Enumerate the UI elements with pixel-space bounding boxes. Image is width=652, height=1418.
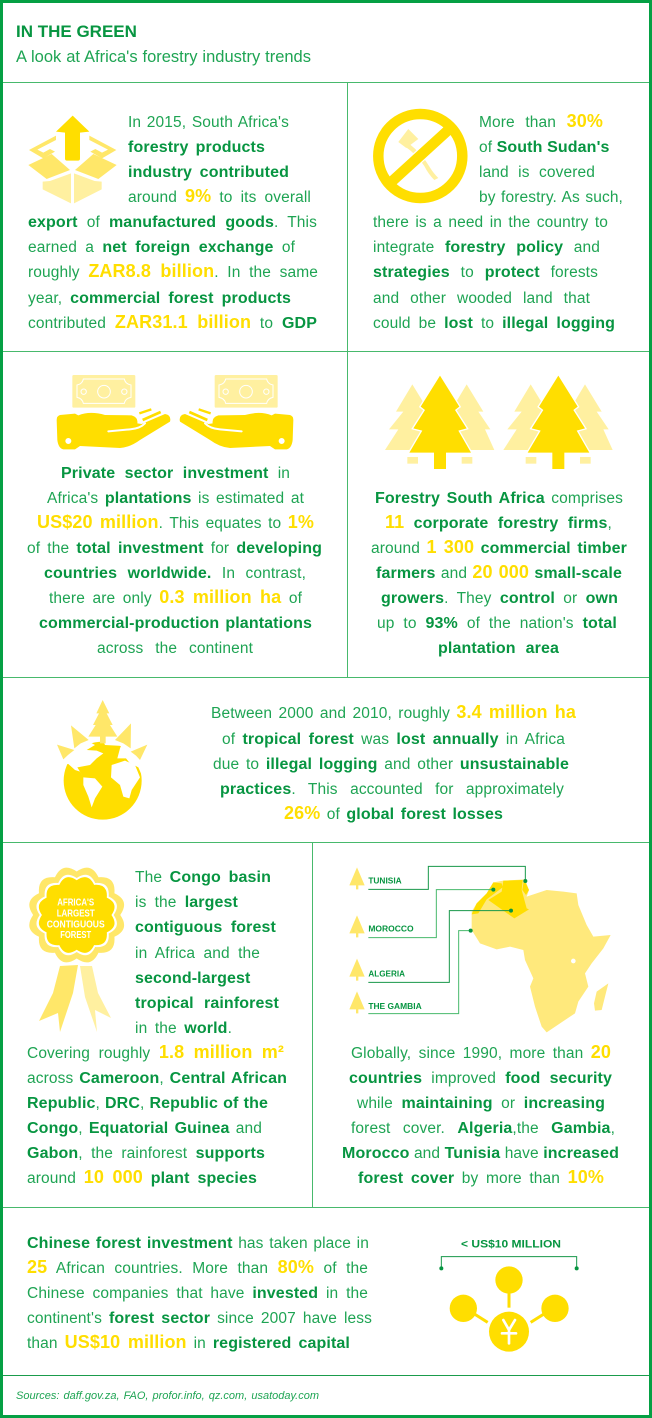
map: Africa with labelled countries: TUNISIA xyxy=(368,876,402,886)
panel: Chinese forest investment: Chinese companies that have invested in the xyxy=(27,1285,368,1302)
icon: open box with arrow xyxy=(28,116,116,204)
panel: Congo basin: in Africa and the xyxy=(135,945,260,962)
panel: food security: while maintaining or increasing xyxy=(357,1095,605,1112)
panel: export of forestry products: export of manufactured goods. This xyxy=(28,214,317,231)
panel: Forestry South Africa: plantation area xyxy=(438,640,559,657)
panel: food security: forest cover by more than 10% xyxy=(358,1167,604,1187)
text: food security xyxy=(342,1042,619,1187)
panel: Congo basin: around 10 000 plant species xyxy=(27,1167,257,1187)
icon: rosette badge: CONTIGUOUS xyxy=(47,920,105,930)
panel: South Sudan: strategies to protect forests xyxy=(373,264,598,281)
panel: export of forestry products: In 2015, South Africa's xyxy=(128,114,289,131)
map: Africa outline xyxy=(472,879,611,1032)
panel: private sector investment: countries worldwide. In contrast, xyxy=(44,565,306,582)
text: Forestry South Africa xyxy=(371,490,627,657)
text: export xyxy=(28,114,318,332)
panel: Congo basin: in the world. xyxy=(135,1020,232,1037)
panel: private sector investment: US$20 million. This equates to 1% xyxy=(37,512,314,532)
map: Africa with labelled countries: THE GAMBIA xyxy=(368,1001,422,1011)
panel: South Sudan: by forestry. As such, xyxy=(479,189,623,206)
panel: South Sudan: integrate forestry policy and xyxy=(373,239,600,256)
panel: South Sudan: More than 30% xyxy=(479,111,603,131)
panel: Congo basin: Gabon, the rainforest supports xyxy=(27,1145,265,1162)
icon: hands with banknotes xyxy=(56,375,294,450)
panel: Congo basin: Covering roughly 1.8 million m² xyxy=(27,1042,284,1062)
icon: rosette badge: LARGEST xyxy=(57,908,95,920)
text: Chinese investment xyxy=(27,1235,372,1352)
icon: no axe sign xyxy=(373,108,468,204)
panel: Chinese forest investment: continent's forest sector since 2007 have less xyxy=(27,1310,372,1327)
panel: Chinese forest investment: 25 African countries. More than 80% of the xyxy=(27,1257,368,1277)
panel: Congo basin: contiguous forest xyxy=(135,919,276,936)
panel: private sector investment: commercial-production plantations xyxy=(39,615,312,632)
panel: South Sudan: and other wooded land that xyxy=(373,290,590,307)
icon: rosette badge: AFRICA'S xyxy=(57,898,94,908)
panel: tropical forest loss: 26% of global forest losses xyxy=(284,803,503,823)
panel: private sector investment: there are only 0.3 million ha of xyxy=(49,587,302,607)
sources: Sources: daff.gov.za, FAO, profor.info, qz.com, usatoday.com xyxy=(16,1390,319,1402)
subtitle: A look at Africa's forestry industry trends xyxy=(16,48,311,66)
panel: Forestry South Africa: Forestry South Africa comprises xyxy=(375,490,623,507)
panel: private sector investment: of the total investment for developing xyxy=(27,540,322,557)
panel: export of forestry products: year, commercial forest products xyxy=(28,290,291,307)
panel: private sector investment: Private sector investment in xyxy=(61,465,290,482)
panel: tropical forest loss: Between 2000 and 2010, roughly 3.4 million ha xyxy=(211,702,576,722)
panel: export of forestry products: around 9% to its overall xyxy=(128,186,311,206)
panel: Chinese forest investment: than US$10 million in registered capital xyxy=(27,1332,350,1352)
panel: Forestry South Africa: around 1 300 commercial timber xyxy=(371,537,627,557)
panel: Forestry South Africa: farmers and 20 000 small-scale xyxy=(376,562,622,582)
panel: export of forestry products: earned a net foreign exchange of xyxy=(28,239,295,256)
icon: rosette badge: FOREST xyxy=(60,930,91,941)
text: tropical forest loss xyxy=(211,702,576,823)
icon: globe with trees xyxy=(57,700,148,820)
panel: Congo basin: The Congo basin xyxy=(135,869,271,886)
map: Africa with labelled countries xyxy=(349,866,611,1032)
panel: food security: Morocco and Tunisia have increased xyxy=(342,1145,619,1162)
panel: South Sudan: of South Sudan's xyxy=(479,139,610,156)
title: IN THE GREEN xyxy=(16,22,137,41)
panel: export of forestry products: roughly ZAR8.8 billion. In the same xyxy=(28,261,318,281)
text: South Sudan xyxy=(373,111,623,332)
panel: private sector investment: across the continent xyxy=(97,640,253,657)
panel: South Sudan: land is covered xyxy=(479,164,595,181)
icon: rosette badge xyxy=(29,868,124,1032)
panel: food security: Globally, since 1990, more than 20 xyxy=(351,1042,611,1062)
panel: tropical forest loss: of tropical forest was lost annually in Africa xyxy=(222,731,565,748)
panel: Forestry South Africa: up to 93% of the nation's total xyxy=(377,615,617,632)
map: Africa with labelled countries: ALGERIA xyxy=(368,969,406,979)
panel: Congo basin: second-largest xyxy=(135,970,250,987)
panel: Congo basin: Republic, DRC, Republic of the xyxy=(27,1095,268,1112)
panel: Forestry South Africa: growers. They control or own xyxy=(381,590,618,607)
panel: tropical forest loss: due to illegal logging and other unsustainable xyxy=(213,756,569,773)
icon: pine trees xyxy=(385,376,613,469)
panel: South Sudan: could be lost to illegal logging xyxy=(373,315,615,332)
icon: yuan network xyxy=(439,1239,579,1352)
panel: food security: countries improved food security xyxy=(349,1070,612,1087)
panel: food security: forest cover. Algeria,the Gambia, xyxy=(351,1120,615,1137)
icon: yuan network: < US$10 MILLION xyxy=(461,1239,561,1251)
panel: Congo basin: Congo, Equatorial Guinea and xyxy=(27,1120,262,1137)
panel: Chinese forest investment: Chinese forest investment has taken place in xyxy=(27,1235,369,1252)
panel: tropical forest loss: practices. This accounted for approximately xyxy=(220,781,564,798)
panel: Congo basin: is the largest xyxy=(135,894,238,911)
text: Congo basin xyxy=(27,869,287,1187)
panel: South Sudan: there is a need in the country to xyxy=(373,214,608,231)
text: private investment xyxy=(27,465,322,657)
panel: Congo basin: across Cameroon, Central African xyxy=(27,1070,287,1087)
panel: private sector investment: Africa's plantations is estimated at xyxy=(47,490,304,507)
panel: Forestry South Africa: 11 corporate forestry firms, xyxy=(385,512,612,532)
panel: Congo basin: tropical rainforest xyxy=(135,995,279,1012)
panel: export of forestry products: forestry products xyxy=(128,139,265,156)
panel: export of forestry products: industry contributed xyxy=(128,164,289,181)
panel: export of forestry products: contributed ZAR31.1 billion to GDP xyxy=(28,312,317,332)
map: Africa with labelled countries: MOROCCO xyxy=(368,924,414,934)
